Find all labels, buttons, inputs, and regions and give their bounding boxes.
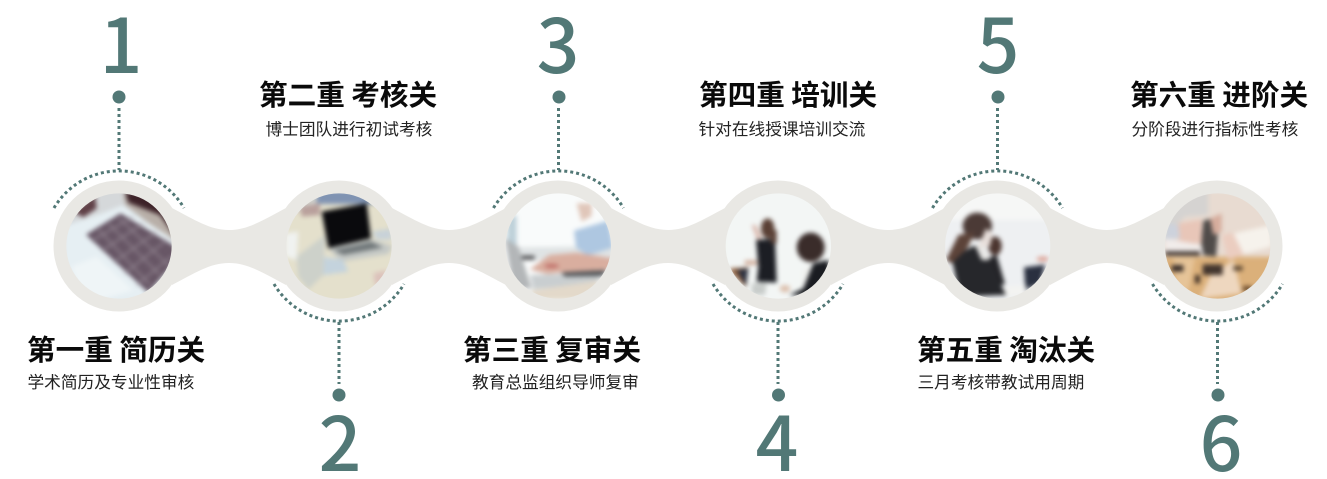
text block: step 5 bbox=[917, 328, 1095, 393]
text block: step 2 bbox=[259, 73, 437, 140]
text block: step 3 bbox=[463, 328, 641, 393]
text block: step 5: 三月考核带教试用周期 bbox=[918, 369, 1084, 393]
text block: step 4: 针对在线授课培训交流 bbox=[698, 116, 866, 140]
photo 2: laptop on meeting table bbox=[288, 193, 392, 298]
photo 6: hands raised over conference table bbox=[1165, 194, 1270, 299]
step 2 marker: number, dot and dotted arc bbox=[274, 284, 404, 479]
photo 1: laptop keyboard close-up bbox=[66, 194, 172, 298]
text block: step 4 bbox=[698, 73, 877, 140]
photo 4: presenter at whiteboard bbox=[726, 194, 831, 298]
step 3 marker: number, dot and dotted arc bbox=[494, 0, 624, 208]
text block: step 6: 分阶段进行指标性考核 bbox=[1132, 116, 1299, 140]
text block: step 3: 第三重 复审关 bbox=[463, 328, 641, 369]
photo 3: hands typing on laptop bbox=[506, 194, 611, 298]
text block: step 4: 第四重 培训关 bbox=[699, 73, 877, 114]
text block: step 1: 学术简历及专业性审核 bbox=[28, 369, 195, 393]
step 4 marker: number, dot and dotted arc bbox=[713, 284, 843, 479]
text block: step 1 bbox=[27, 328, 205, 393]
text block: step 3: 教育总监组织导师复审 bbox=[472, 369, 639, 393]
keyboard key grid bbox=[93, 217, 173, 285]
photo 5: two women in a meeting bbox=[945, 194, 1050, 298]
text block: step 6 bbox=[1130, 73, 1308, 140]
step 1 marker: number, dot and dotted arc bbox=[54, 0, 184, 208]
text block: step 2: 第二重 考核关 bbox=[259, 73, 437, 114]
text block: step 5: 第五重 淘汰关 bbox=[917, 328, 1095, 369]
connecting band with six circle nodes bbox=[54, 180, 1282, 312]
step 5 marker: number, dot and dotted arc bbox=[932, 0, 1062, 208]
text block: step 6: 第六重 进阶关 bbox=[1130, 73, 1308, 114]
text block: step 1: 第一重 简历关 bbox=[27, 328, 205, 369]
text block: step 2: 博士团队进行初试考核 bbox=[266, 116, 433, 140]
step 6 marker: number, dot and dotted arc bbox=[1152, 284, 1282, 479]
